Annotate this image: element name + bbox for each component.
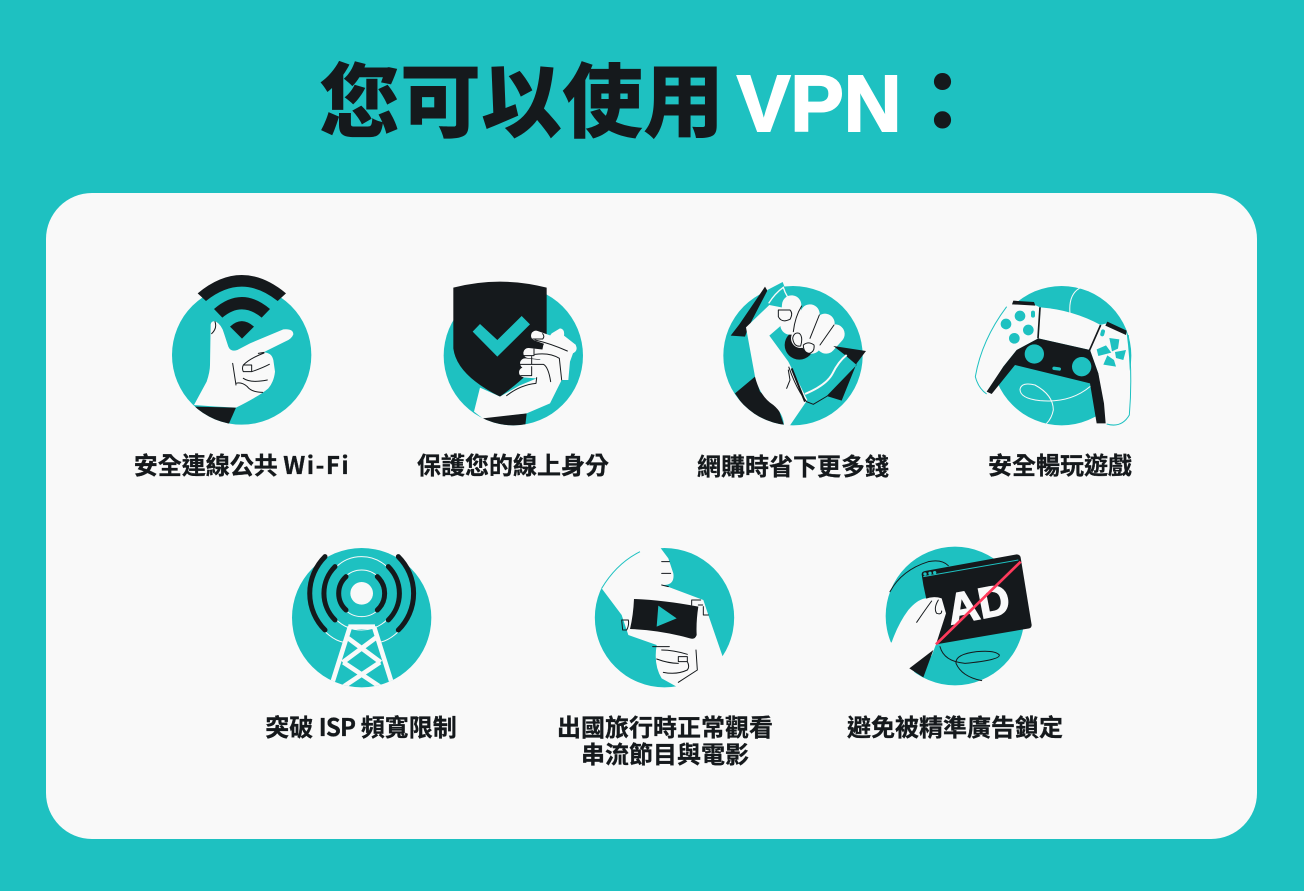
icon: wifi hand xyxy=(172,275,311,425)
label: identity: 保護您的線上身分 xyxy=(417,446,609,481)
title: 您可以使用 xyxy=(319,38,724,155)
label: streaming: 出國旅行時正常觀看 xyxy=(557,708,773,743)
controller body xyxy=(987,338,1106,423)
panel: white card xyxy=(46,193,1257,839)
label: shopping: 網購時省下更多錢 xyxy=(697,447,889,482)
icon: shield hand xyxy=(444,282,583,428)
touchpad xyxy=(1038,307,1101,350)
icon: blocked ad: AD xyxy=(943,575,1014,634)
title: ： xyxy=(902,38,983,155)
black strip xyxy=(731,287,767,337)
icon: signal tower xyxy=(292,548,431,689)
right grip xyxy=(1090,323,1130,426)
label: ads: 避免被精準廣告鎖定 xyxy=(847,708,1063,743)
title xyxy=(319,38,983,155)
label: streaming: 串流節目與電影 xyxy=(581,735,749,770)
icon: framed video xyxy=(590,542,740,692)
icon: fist with money xyxy=(723,282,866,430)
icon: blocked ad xyxy=(880,547,1032,685)
label: gaming: 安全暢玩遊戲 xyxy=(988,446,1132,481)
title: VPN xyxy=(737,59,902,148)
label: public wifi: 安全連線公共 Wi-Fi xyxy=(134,446,350,481)
label: ISP: 突破 ISP 頻寬限制 xyxy=(265,708,457,743)
icon: game controller xyxy=(975,286,1131,426)
left grip xyxy=(975,303,1040,393)
